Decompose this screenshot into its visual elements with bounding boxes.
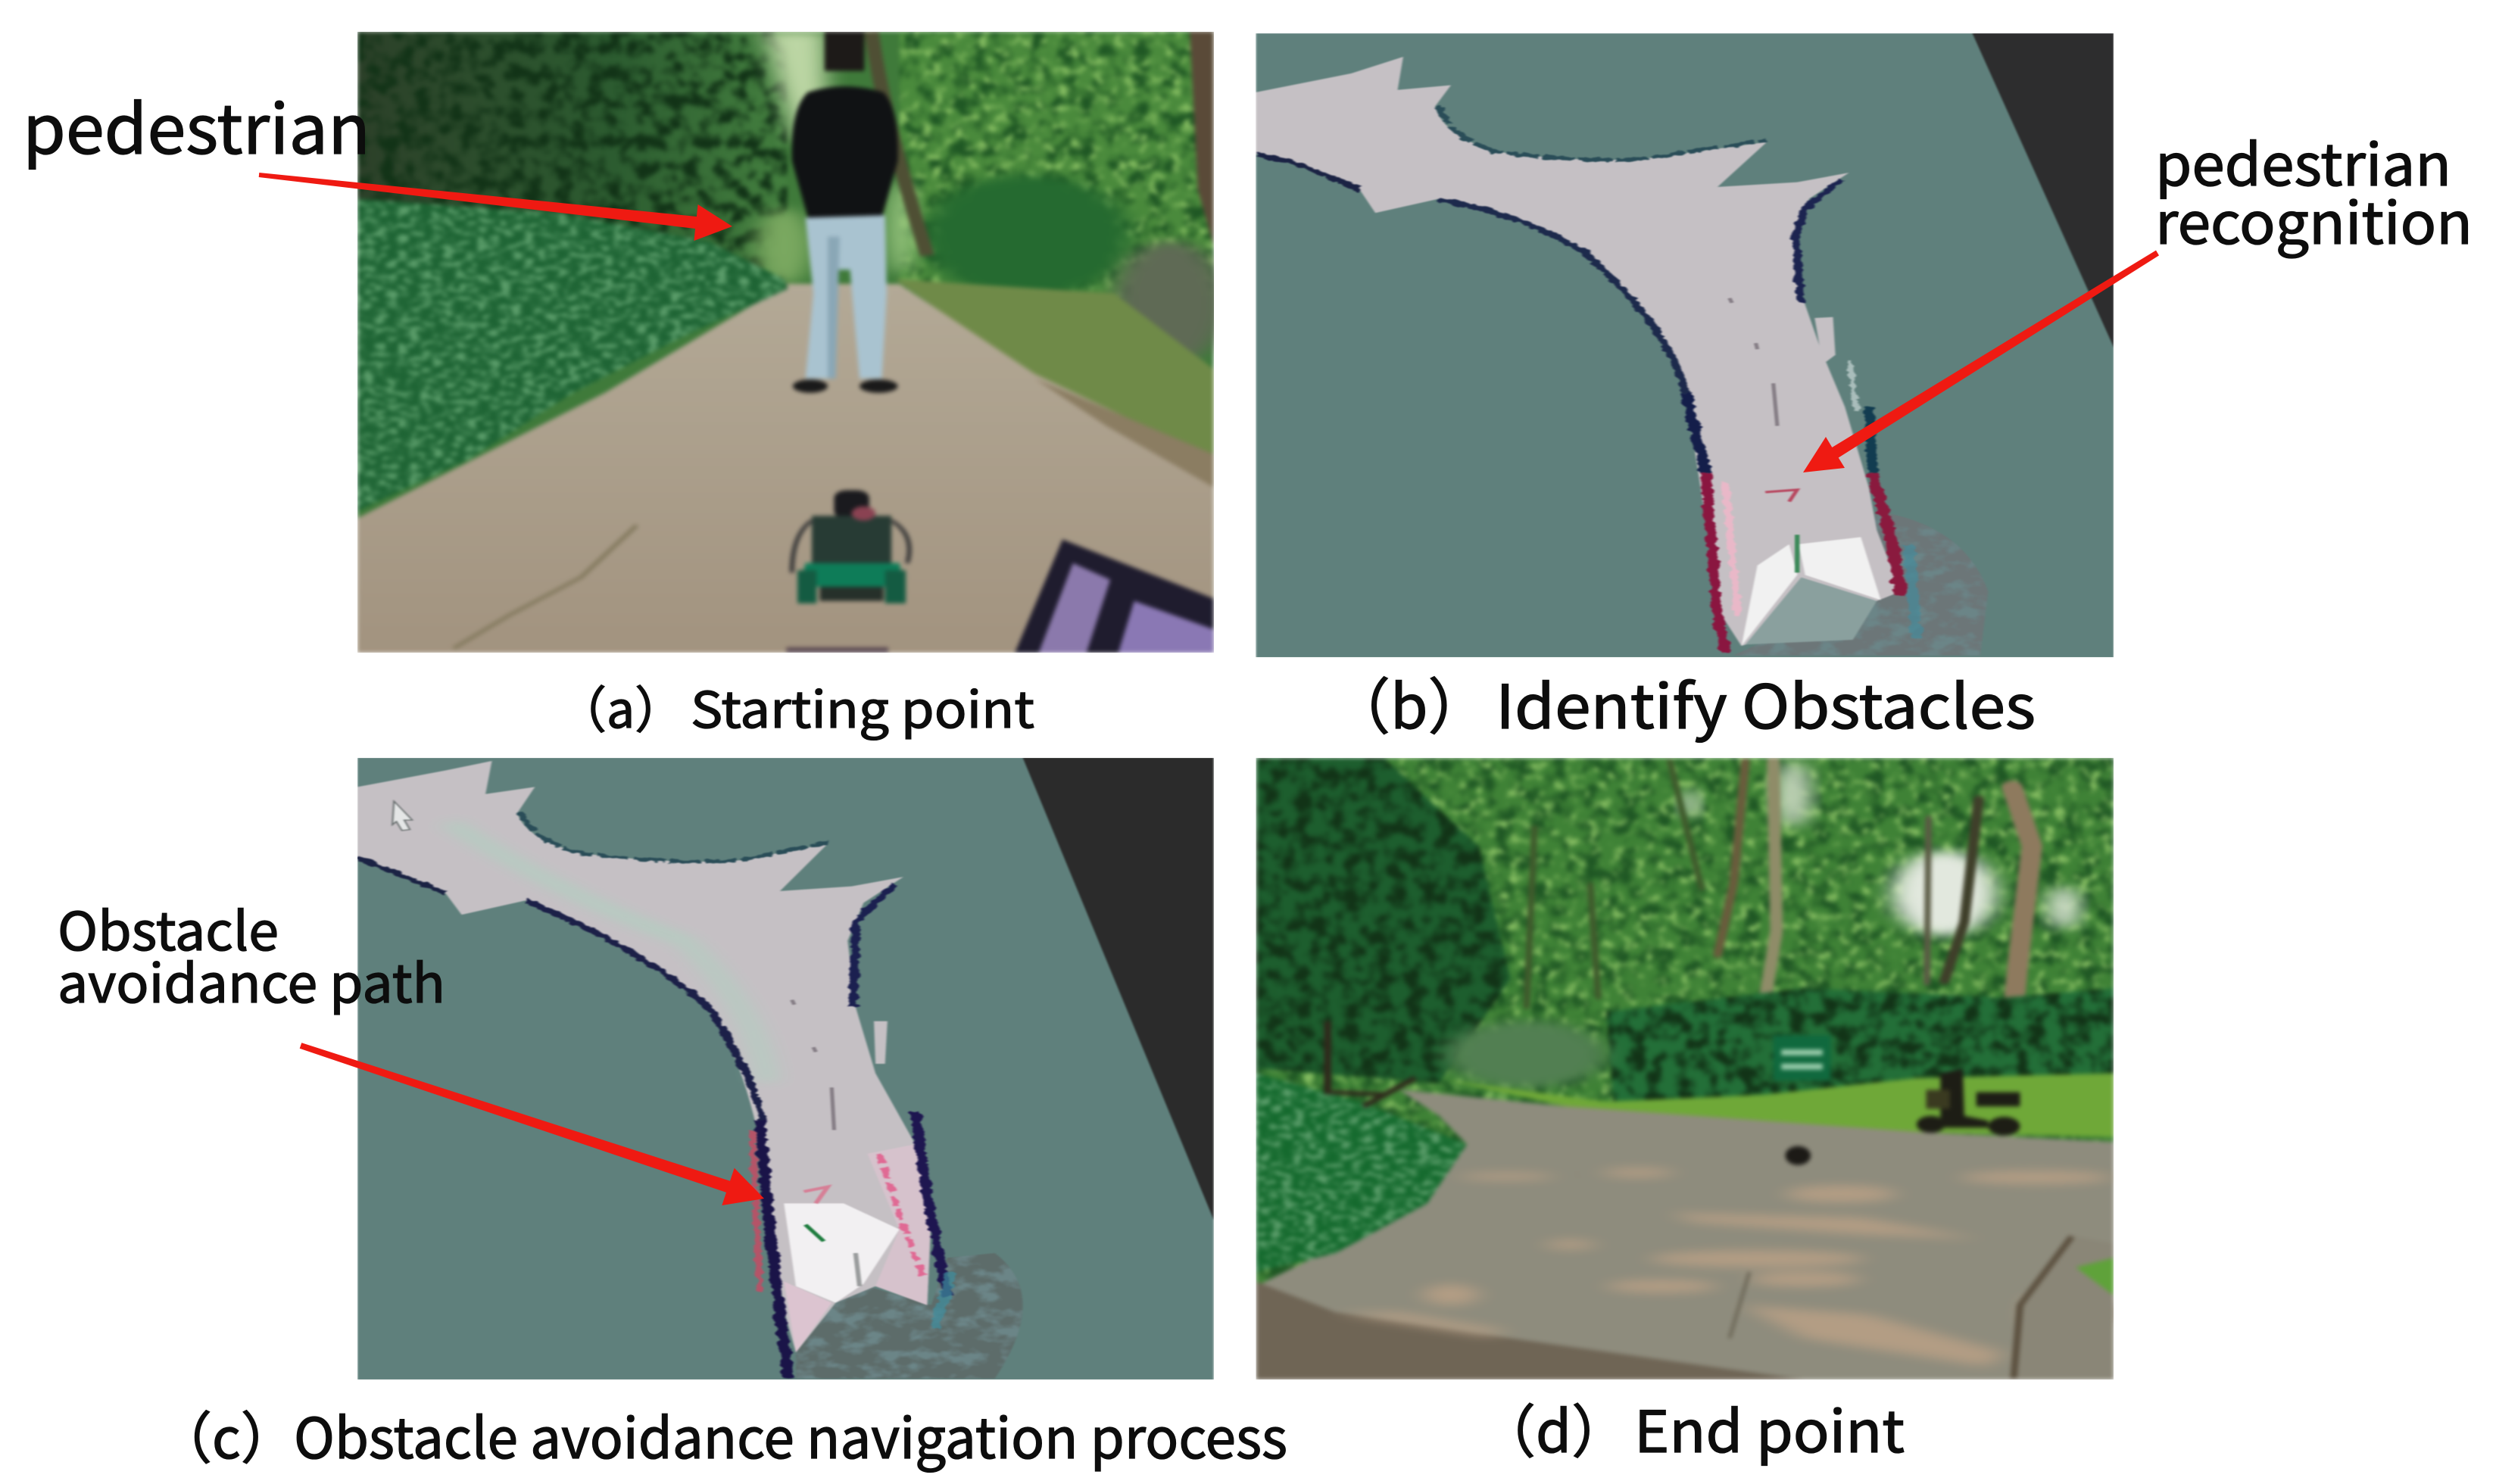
caption c: （c）: [156, 1394, 297, 1475]
arrow: pedestrian recognition pointer: [1803, 251, 2159, 472]
label: pedestrian recognition: recognition: [2155, 177, 2473, 260]
caption b: Identify Obstacles: [1496, 659, 2036, 747]
caption b: （b）: [1330, 659, 1488, 747]
caption a: Starting point: [691, 670, 1034, 743]
caption d: End point: [1634, 1386, 1905, 1469]
icon: robot at end point: [1785, 1146, 1811, 1165]
panel a: starting point photo: [357, 31, 1226, 653]
caption a: （a）: [557, 670, 685, 743]
caption c: Obstacle avoidance navigation process: [294, 1394, 1287, 1475]
arrow: pedestrian pointer: [259, 173, 732, 241]
label: pedestrian: pedestrian: [23, 75, 370, 173]
arrow: avoidance path pointer: [300, 1043, 764, 1205]
panel c: navigation map with avoidance path: [357, 758, 1214, 1380]
icon: green sign: [1774, 1036, 1830, 1080]
label: obstacle avoidance path: avoidance path: [58, 942, 445, 1018]
icon: parked scooter: [1917, 1068, 2020, 1136]
label: obstacle avoidance path: Obstacle: [58, 890, 279, 966]
label: pedestrian recognition: pedestrian: [2155, 119, 2451, 202]
icon: mouse cursor: [392, 801, 412, 831]
panel d: end point photo: [1256, 758, 2114, 1380]
panel b: obstacle identification map: [1256, 33, 2114, 658]
caption d: （d）: [1478, 1386, 1629, 1469]
